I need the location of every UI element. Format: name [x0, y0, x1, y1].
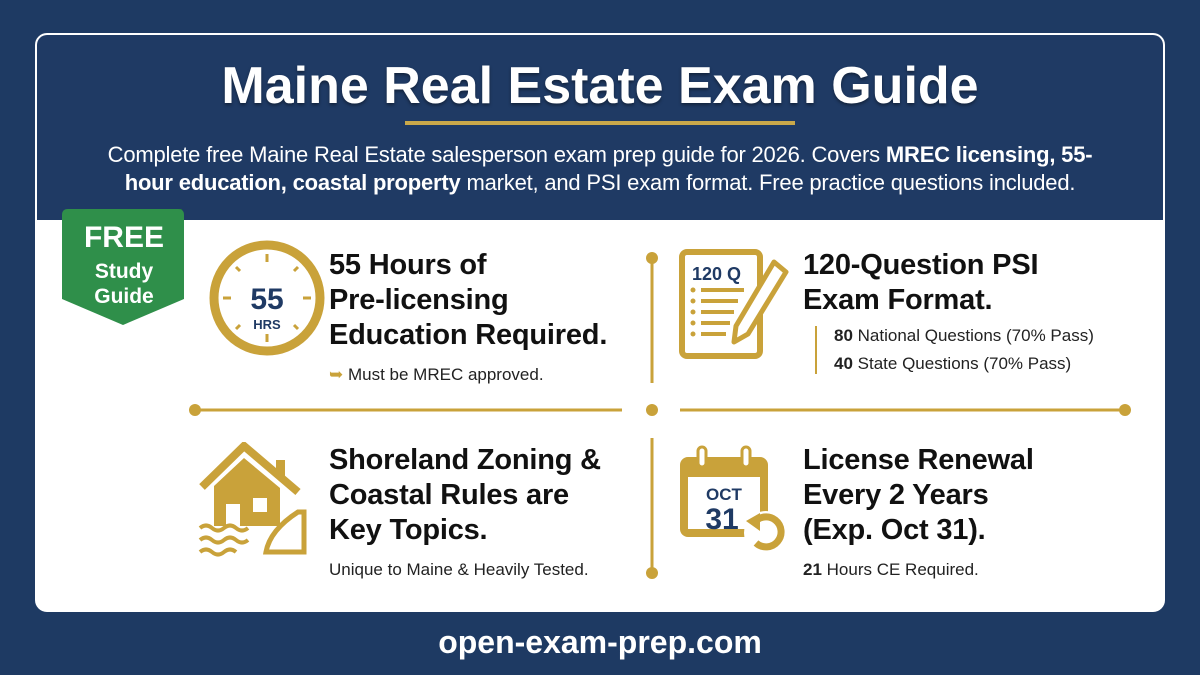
text: 55 hours: Pre-licensing [329, 284, 509, 316]
icon: calendar oct 31: 31 [705, 503, 739, 536]
text: shoreland [329, 444, 601, 579]
text: license renewal [803, 444, 1034, 579]
text: shoreland: Unique to Maine & Heavily Tested. [329, 560, 589, 579]
badge: free study guide: Study [95, 260, 153, 283]
icon: coastal house [198, 442, 306, 557]
icon: calendar oct 31: OCT [706, 485, 743, 504]
header panel [37, 35, 1163, 220]
text: 120 question: Exam Format. [803, 284, 992, 316]
text: shoreland: Coastal Rules are [329, 479, 569, 511]
text: license renewal: License Renewal [803, 444, 1034, 476]
list: question breakdown: 80 National Questions (70% Pass) [834, 326, 1094, 345]
list: question breakdown [815, 326, 1155, 374]
text: 55 hours: 55 Hours of [329, 249, 486, 281]
footer url: open-exam-prep.com [438, 624, 762, 660]
icon: clock 55 hrs: 55 [250, 283, 284, 316]
title underline [405, 121, 795, 125]
text: 55 hours [329, 249, 607, 384]
text: 120 question: 120-Question PSI [803, 249, 1038, 281]
icon: clock 55 hrs: HRS [253, 317, 281, 332]
badge: free study guide: Guide [94, 285, 154, 308]
icon: clock 55 hrs [210, 240, 324, 356]
list: question breakdown: 40 State Questions (70% Pass) [834, 354, 1071, 373]
text: license renewal: (Exp. Oct 31). [803, 514, 986, 546]
text: 55 hours: Education Required. [329, 319, 607, 351]
icon: exam sheet with pencil: 120 Q [692, 264, 741, 284]
text: license renewal: 21 Hours CE Required. [803, 560, 979, 579]
subtitle [108, 142, 1092, 195]
text: license renewal: Every 2 Years [803, 479, 989, 511]
badge: free study guide [62, 209, 184, 325]
title: Maine Real Estate Exam Guide [221, 57, 979, 115]
text: 120 question [803, 249, 1094, 374]
text: shoreland: Key Topics. [329, 514, 487, 546]
text: shoreland: Shoreland Zoning & [329, 444, 601, 476]
text: 55 hours: ➥ Must be MREC approved. [329, 365, 544, 384]
icon: calendar oct 31 [680, 446, 785, 550]
subtitle: hour education, coastal property market, and PSI exam format. Free practice questions included. [125, 170, 1075, 195]
badge: free study guide: FREE [84, 221, 164, 254]
subtitle: Complete free Maine Real Estate salesperson exam prep guide for 2026. Covers MREC licensing, 55- [108, 142, 1092, 167]
icon: exam sheet with pencil [679, 249, 789, 359]
